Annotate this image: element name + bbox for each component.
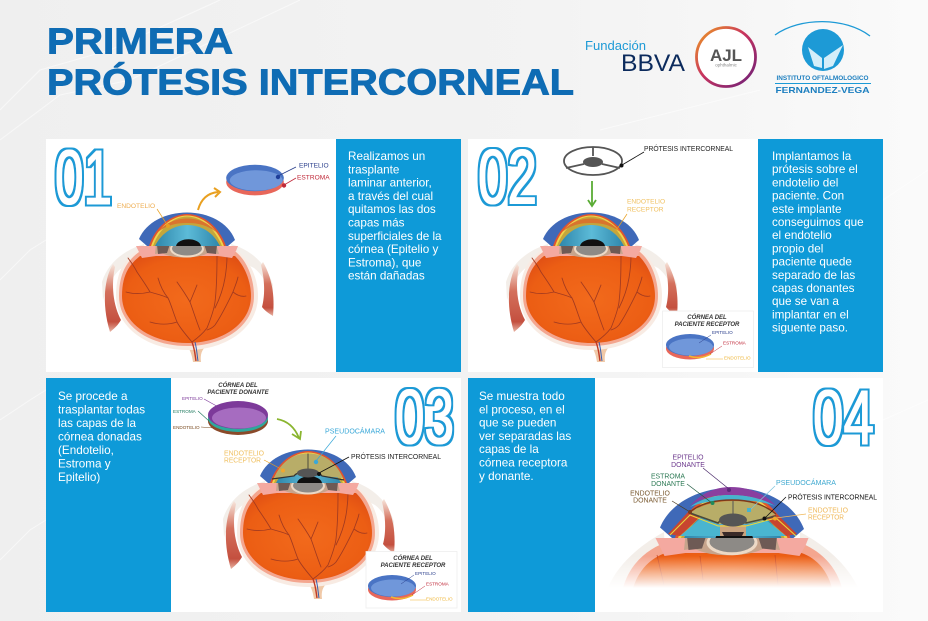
text block: step 02: prótesis sobre el: [772, 163, 858, 176]
inset: cornea receptor: CÓRNEA DEL: [393, 555, 433, 562]
text block: step 02: conseguimos que: [772, 216, 864, 229]
text block: step 03: [46, 378, 171, 612]
inset: cornea receptor: EPITELIO: [415, 571, 436, 576]
prosthesis: [564, 144, 733, 175]
number 03: 03: [395, 374, 454, 460]
label: epitelio donante: EPITELIO: [672, 454, 704, 462]
label: pseudocamara: PSEUDOCÁMARA: [325, 426, 386, 436]
label: endotelio donante: DONANTE: [633, 498, 667, 504]
label: estroma donante: [651, 474, 714, 505]
text block: step 01: están dañadas: [348, 270, 425, 283]
label: endotelio: ENDOTELIO: [117, 203, 155, 210]
logo: AJL ophthalmic: AJL: [710, 46, 742, 65]
arrow: [198, 188, 220, 210]
text block: step 01: Estroma), que: [348, 256, 421, 269]
text block: step 03: Se procede a: [58, 390, 128, 403]
donor cornea: CÓRNEA DEL: [218, 382, 258, 389]
donor cornea: ESTROMA: [173, 409, 197, 414]
text block: step 03: Epitelio): [58, 471, 100, 484]
prosthesis: PRÓTESIS INTERCORNEAL: [644, 144, 733, 153]
text block: step 01: superficiales de la: [348, 230, 442, 243]
removed cornea layers: [226, 162, 330, 195]
label: estroma donante: DONANTE: [651, 481, 685, 488]
label: estroma donante: ESTROMA: [651, 474, 685, 480]
label: endotelio receptor: ENDOTELIO: [224, 448, 264, 458]
panel: step 01: [46, 135, 461, 372]
text block: step 02: propio del: [772, 242, 823, 255]
text block: step 02: paciente. Con: [772, 190, 844, 203]
donor cornea: PACIENTE DONANTE: [207, 390, 270, 396]
label: epitelio donante: [671, 454, 731, 492]
text block: step 04: córnea receptora: [479, 456, 568, 470]
inset: cornea receptor: ENDOTELIO: [426, 596, 453, 602]
label: pseudocamara: PSEUDOCÁMARA: [776, 478, 836, 487]
inset: cornea receptor: ESTROMA: [723, 340, 747, 346]
text block: step 04: que se pueden: [479, 417, 556, 430]
inset: cornea receptor: PACIENTE RECEPTOR: [381, 563, 446, 569]
label: endotelio: [117, 203, 170, 228]
label: protesis intercorneal: [762, 492, 877, 520]
text block: step 01: a través del cual: [348, 190, 433, 203]
text block: step 02: el endotelio: [772, 229, 832, 242]
number 02: 02: [478, 134, 537, 220]
logo: Fundación BBVA: BBVA: [621, 50, 685, 77]
label: protesis intercorneal: PRÓTESIS INTERCORNEAL: [351, 452, 441, 461]
label: endotelio receptor: [615, 198, 665, 232]
enlarged eye with donor layers: [600, 487, 870, 588]
text block: step 02: endotelio del: [772, 176, 838, 189]
text block: step 02: siguente paso.: [772, 322, 848, 335]
logo: AJL ophthalmic: ophthalmic: [715, 62, 738, 68]
text block: step 01: [336, 139, 461, 372]
label: pseudocamara: [314, 426, 386, 464]
text block: step 03: córnea donadas: [58, 430, 142, 444]
label: endotelio receptor: ENDOTELIO: [808, 508, 849, 514]
text block: step 02: Implantamos la: [772, 150, 852, 163]
text block: step 02: capas donantes: [772, 282, 855, 295]
title: PRIMERA: [47, 20, 233, 62]
number 04: 04: [813, 375, 874, 461]
number 01: 01: [55, 135, 112, 221]
eye illustration: [506, 212, 678, 362]
text block: step 03: Estroma y: [58, 458, 111, 470]
logo: Fundación BBVA: [585, 39, 685, 77]
text block: step 04: ver separadas las: [479, 430, 571, 443]
logo: Instituto Oftalmologico Fernandez-Vega: [775, 22, 871, 95]
text block: step 02: paciente quede: [772, 256, 852, 269]
text block: step 02: que se van a: [772, 295, 839, 308]
label: pseudocamara: [747, 478, 836, 512]
inset: cornea receptor: PACIENTE RECEPTOR: [675, 322, 740, 328]
logo: Instituto Oftalmologico Fernandez-Vega: INSTITUTO OFTALMOLOGICO: [776, 75, 869, 82]
inset: cornea receptor: ENDOTELIO: [724, 356, 751, 360]
inset: cornea receptor: CÓRNEA DEL: [687, 314, 727, 321]
eye illustration: [102, 212, 274, 362]
logo: Instituto Oftalmologico Fernandez-Vega: FERNANDEZ-VEGA: [776, 85, 870, 95]
inset: cornea receptor: [662, 311, 754, 368]
label: endotelio receptor: RECEPTOR: [627, 206, 664, 214]
donor cornea: ENDOTELIO: [173, 425, 200, 430]
text block: step 01: trasplante: [348, 163, 399, 176]
panel: step 02: [468, 134, 883, 372]
label: endotelio donante: [630, 490, 692, 514]
text block: step 04: y donante.: [479, 470, 534, 483]
donor cornea: EPITELIO: [182, 396, 203, 401]
logo: AJL ophthalmic: [696, 28, 756, 86]
label: endotelio receptor: ENDOTELIO: [627, 198, 665, 206]
label: protesis intercorneal: [317, 452, 441, 476]
eye illustration with prosthesis: [223, 450, 395, 599]
removed cornea layers: ESTROMA: [297, 174, 330, 182]
text block: step 02: [758, 139, 883, 372]
text block: step 02: implantar en el: [772, 308, 849, 321]
logo: Fundación BBVA: Fundación: [585, 39, 646, 53]
arrow: [277, 419, 301, 439]
text block: step 04: el proceso, en el: [479, 403, 565, 416]
text block: step 02: este implante: [772, 203, 842, 216]
text block: step 04: capas de la: [479, 443, 539, 456]
text block: step 03: (Endotelio,: [58, 444, 114, 457]
text block: step 01: capas más: [348, 216, 405, 230]
text block: step 01: laminar anterior,: [348, 177, 432, 190]
label: endotelio donante: ENDOTELIO: [630, 490, 671, 498]
label: endotelio receptor: [224, 448, 285, 472]
text block: step 04: Se muestra todo: [479, 390, 565, 403]
arrow: [588, 181, 596, 206]
label: protesis intercorneal: PRÓTESIS INTERCORNEAL: [788, 492, 877, 502]
inset: cornea receptor: [366, 552, 457, 608]
label: epitelio donante: DONANTE: [671, 462, 705, 469]
text block: step 01: córnea (Epitelio y: [348, 243, 438, 256]
text block: step 03: trasplantar todas: [58, 404, 145, 416]
label: endotelio receptor: RECEPTOR: [808, 514, 844, 522]
label: endotelio receptor: [773, 508, 849, 522]
removed cornea layers: EPITELIO: [299, 162, 329, 170]
panel: step 03: [46, 374, 461, 612]
panel: step 04: [468, 375, 883, 612]
text block: step 02: separado de las: [772, 269, 855, 282]
title: [47, 20, 574, 102]
inset: cornea receptor: ESTROMA: [426, 582, 450, 586]
text block: step 01: quitamos las dos: [348, 203, 436, 216]
inset: cornea receptor: EPITELIO: [712, 330, 733, 335]
donor cornea: [173, 382, 270, 435]
text block: step 01: Realizamos un: [348, 150, 425, 163]
label: endotelio receptor: RECEPTOR: [224, 456, 261, 464]
title: PRÓTESIS INTERCORNEAL: [47, 60, 574, 102]
text block: step 03: las capas de la: [58, 417, 136, 430]
text block: step 04: [468, 378, 595, 612]
